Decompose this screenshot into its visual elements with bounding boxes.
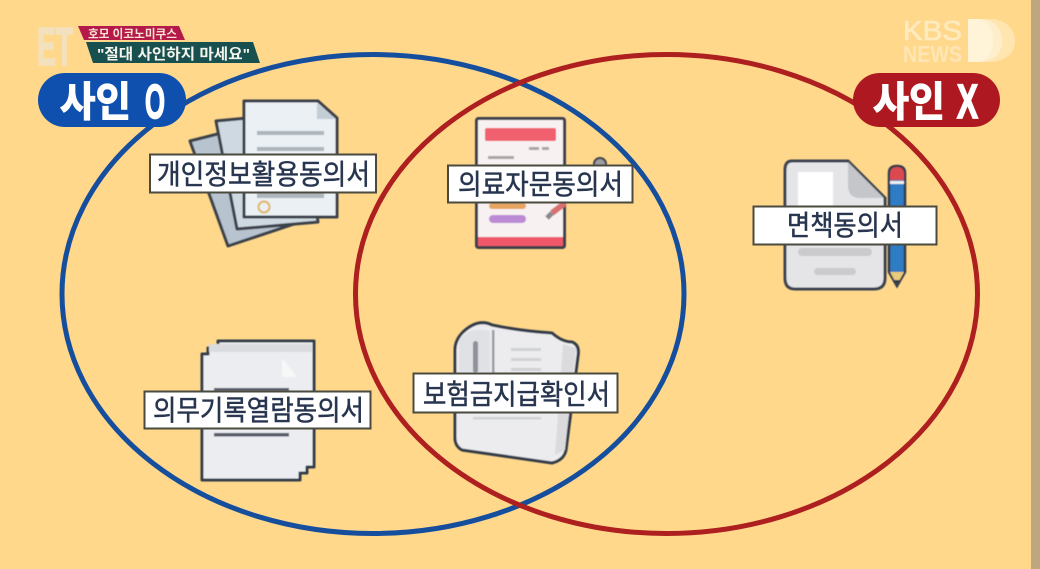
ET logo watermark: ET <box>37 17 73 77</box>
badge: sign X <box>853 73 1000 129</box>
item: personal information consent <box>150 101 376 246</box>
program caption banner <box>78 26 260 63</box>
badge: sign O: 사인 <box>60 79 131 125</box>
icon: clipped papers <box>455 323 578 463</box>
icon: document stack <box>190 101 337 246</box>
label box: 면책동의서 <box>787 210 903 241</box>
KBS News watermark: KBS <box>903 15 962 46</box>
item: insurance payment confirmation <box>414 323 618 463</box>
badge: sign X: X <box>957 76 978 129</box>
label box: 개인정보활용동의서 <box>157 159 370 190</box>
venn circle: sign X (red) <box>356 54 978 534</box>
item: medical records access consent <box>144 341 370 480</box>
KBS News watermark <box>903 15 1015 67</box>
venn circle: sign O (blue) <box>62 54 684 534</box>
label box <box>754 206 936 244</box>
program caption banner: "절대 사인하지 마세요" <box>97 46 250 63</box>
program caption banner: 호모 이코노미쿠스 <box>88 27 177 41</box>
badge: sign O: O <box>145 76 165 129</box>
icon: form with pen <box>476 118 606 248</box>
badge: sign O <box>38 73 186 129</box>
KBS News watermark: NEWS <box>903 41 962 67</box>
label box: 의료자문동의서 <box>458 169 623 200</box>
label box: 보험금지급확인서 <box>423 379 610 410</box>
label box: 의무기록열람동의서 <box>153 395 364 426</box>
item: medical advisory consent <box>448 118 632 248</box>
icon: paper pile <box>202 341 314 480</box>
icon: document with pencil <box>785 161 905 289</box>
badge: sign X: 사인 <box>873 79 945 125</box>
item: liability waiver <box>754 161 936 289</box>
